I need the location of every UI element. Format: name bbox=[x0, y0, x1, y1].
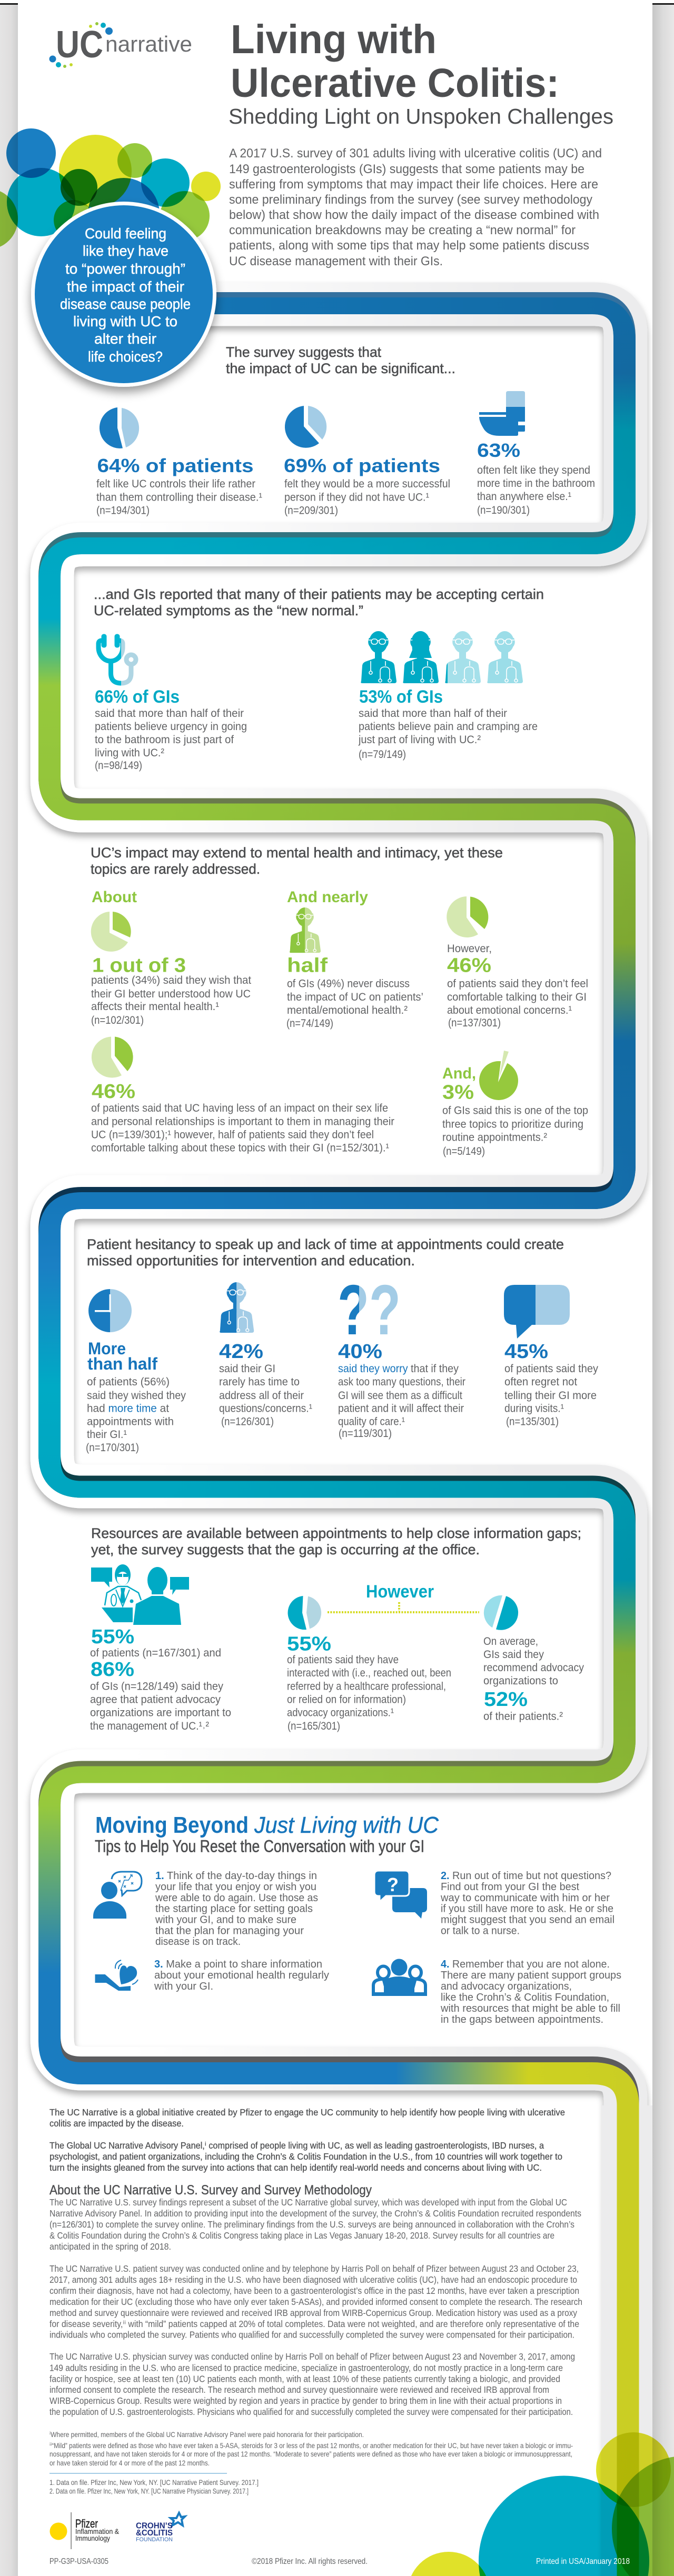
footnotes: ⁱWhere permitted, members of the Global UC Narrative Advisory Panel were paid honoraria for their participation. bbox=[49, 2430, 364, 2439]
stat: 64% of patients: (n=194/301) bbox=[96, 504, 150, 517]
stat: more than half, clock: their GI.¹ bbox=[87, 1429, 127, 1441]
stat: 63%: (n=190/301) bbox=[477, 504, 530, 516]
methodology text bbox=[49, 2197, 582, 2417]
intro paragraph: A 2017 U.S. survey of 301 adults living with ulcerative colitis (UC) and bbox=[229, 146, 602, 161]
panel: patient hesitancy bbox=[86, 1236, 598, 1454]
tip 1 bbox=[155, 1870, 318, 1948]
tip 3: 3. Make a point to share information bbox=[154, 1959, 322, 1970]
stat: 66% of GIs: patients believe urgency in going bbox=[95, 721, 247, 733]
tip 1: 1. Think of the day-to-day things in bbox=[155, 1870, 317, 1882]
stat: 69% of patients: (n=209/301) bbox=[284, 504, 338, 517]
tip 1: your life that you enjoy or wish you bbox=[155, 1881, 316, 1893]
intro paragraph bbox=[229, 146, 602, 268]
methodology heading: About the UC Narrative U.S. Survey and Survey Methodology bbox=[49, 2183, 372, 2198]
methodology text: The UC Narrative U.S. physician survey was conducted online by Harris Poll on behalf of Pfizer between August 23 and November 3, 2017, among bbox=[49, 2351, 575, 2362]
methodology text: the population of U.S. gastroenterologists. Physicians who qualified for and successfully completed the survey were compensated for their participation. bbox=[49, 2407, 573, 2417]
icon: hand holding heart bbox=[95, 1960, 138, 1991]
intro text bold: colitis are impacted by the disease. bbox=[49, 2118, 184, 2129]
stat: 45%: of patients said they bbox=[504, 1363, 598, 1375]
stat: 53% of GIs: (n=79/149) bbox=[359, 748, 406, 761]
stat: 69% of patients: person if they did not have UC.¹ bbox=[284, 492, 429, 503]
pie: 64% bbox=[100, 407, 139, 448]
footnotes: or have taken steroid for 4 or more of the past 12 months. bbox=[49, 2459, 210, 2467]
pie: 69% bbox=[285, 406, 326, 448]
stat: nearly half: (n=74/149) bbox=[286, 1017, 333, 1030]
heading: Just Living with UC bbox=[254, 1812, 439, 1838]
heading: yet, the survey suggests that the gap is occurring at the office. bbox=[91, 1542, 480, 1557]
logo: Pfizer Inflammation and Immunology: Immunology bbox=[75, 2534, 110, 2542]
tip 1: were able to do again. Use those as bbox=[155, 1892, 318, 1904]
stat: 66% of GIs bbox=[95, 687, 247, 772]
tip 4: There are many patient support groups bbox=[441, 1970, 621, 1981]
heading bbox=[226, 344, 455, 376]
stat: 52% of patients: 52% bbox=[484, 1689, 528, 1711]
heading bbox=[87, 1236, 564, 1269]
stat: 63%: often felt like they spend bbox=[477, 464, 590, 476]
stat: more than half, clock: appointments with bbox=[87, 1416, 174, 1427]
tip 2: or talk to a nurse. bbox=[441, 1925, 520, 1937]
references: 1. Data on file. Pfizer Inc, New York, NY. [UC Narrative Patient Survey. 2017.] bbox=[49, 2478, 259, 2487]
decorative circle cluster at top left bbox=[0, 128, 221, 249]
callout circle question: Could feeling bbox=[85, 225, 166, 242]
methodology text: medication for their UC (excluding those who have only ever taken 5-ASAs), and provided informed consent to complete the research. The research bbox=[49, 2297, 582, 2307]
title bbox=[231, 17, 559, 106]
stat: 1 out of 3 bbox=[91, 888, 251, 1026]
stat: 55% interacted: of patients said they have bbox=[287, 1654, 399, 1666]
panel: impact of UC bbox=[96, 344, 595, 517]
logo: Pfizer Inflammation and Immunology: Inflammation & bbox=[75, 2527, 120, 2535]
tip 3: about your emotional health regularly bbox=[154, 1970, 329, 1981]
stat: more than half, clock: had more time at bbox=[87, 1403, 169, 1415]
stat: 55% interacted: referred by a healthcare professional, bbox=[287, 1681, 446, 1693]
stat: nearly half bbox=[286, 888, 423, 1030]
callout circle question: life choices? bbox=[88, 348, 163, 365]
footer bbox=[49, 2557, 630, 2566]
icon: stethoscope bbox=[98, 636, 136, 683]
stat: 52% of patients: recommend advocacy bbox=[483, 1662, 584, 1674]
logo: UC narrative bbox=[49, 22, 192, 68]
methodology text: WIRB-Copernicus Group. Results were weighted by region and years in practice by gender to bring them in line with their actual proportions in bbox=[49, 2395, 562, 2406]
tip 1: that the plan for managing your bbox=[155, 1925, 304, 1937]
tip 2: way to communicate with him or her bbox=[440, 1892, 610, 1904]
stat: and 3% bbox=[442, 1051, 588, 1157]
decorative circles bottom right bbox=[408, 2432, 674, 2576]
heading bbox=[91, 845, 503, 877]
heading: the impact of UC can be significant... bbox=[226, 361, 455, 376]
stat: 42%: 42% bbox=[219, 1341, 263, 1363]
stat: 69% of patients: 69% of patients bbox=[284, 455, 440, 476]
stat: 55% and 86% agree: of GIs (n=128/149) said they bbox=[90, 1681, 223, 1693]
tip 2: if you still have more to ask. He or she bbox=[441, 1903, 613, 1915]
stat: 55% and 86% agree: the management of UC.¹˒² bbox=[90, 1720, 209, 1732]
stat: 66% of GIs: 66% of GIs bbox=[95, 687, 180, 707]
stat: 42%: address all of their bbox=[219, 1390, 304, 1402]
methodology text: The UC Narrative U.S. patient survey was conducted online and by telephone by Harris Poll on behalf of Pfizer between August 23 and October 23, bbox=[49, 2263, 579, 2274]
tip 3 bbox=[154, 1959, 329, 1992]
stat: more than half, clock: of patients (56%) bbox=[87, 1376, 170, 1388]
stat: however 46%: comfortable talking to their GI bbox=[447, 991, 587, 1003]
stat: 52% of patients: organizations to bbox=[483, 1675, 558, 1687]
intro text bold: The UC Narrative is a global initiative created by Pfizer to engage the UC community to help identify how people living with ulcerative bbox=[49, 2107, 565, 2118]
stat: 55% and 86% agree: 86% bbox=[91, 1659, 134, 1681]
intro paragraph: below) that show how the daily impact of the disease combined with bbox=[229, 208, 599, 222]
stat: 55% interacted: or relied on for information) bbox=[287, 1694, 406, 1705]
stat: 40%: (n=119/301) bbox=[339, 1427, 392, 1440]
stat: 55% interacted: 55% bbox=[287, 1633, 331, 1655]
heading: UC-related symptoms as the “new normal.” bbox=[94, 603, 363, 618]
intro paragraph: suffering from symptoms that may impact their life choices. Here are bbox=[229, 177, 598, 192]
stat: 66% of GIs: to the bathroom is just part of bbox=[95, 734, 234, 746]
heading: Resources are available between appointments to help close information gaps; bbox=[91, 1525, 581, 1541]
stat: more than half, clock: said they wished they bbox=[87, 1390, 186, 1402]
stat: 46% sex life: comfortable talking about these topics with their GI (n=152/301).¹ bbox=[91, 1142, 389, 1154]
stat: more than half, clock: than half bbox=[87, 1354, 157, 1373]
callout circle question bbox=[31, 202, 216, 387]
tip 4: and advocacy organizations, bbox=[441, 1981, 572, 1992]
methodology text: The UC Narrative U.S. survey findings represent a subset of the UC Narrative global survey, which was developed with input from the Global UC bbox=[49, 2197, 567, 2208]
stat: more than half, clock bbox=[86, 1289, 186, 1454]
stat: 64% of patients: felt like UC controls their life rather bbox=[96, 478, 255, 490]
tip 2: 2. Run out of time but not questions? bbox=[441, 1870, 611, 1882]
stat: 55% interacted: (n=165/301) bbox=[288, 1720, 340, 1732]
stat: and 3%: routine appointments.² bbox=[442, 1132, 547, 1143]
stat: 66% of GIs: (n=98/149) bbox=[95, 760, 142, 772]
stat: 46% sex life: UC (n=139/301);¹ however, half of patients said they don’t feel bbox=[91, 1129, 374, 1141]
stat: 55% and 86% agree: of patients (n=167/301) and bbox=[90, 1647, 221, 1659]
stat: 52% of patients bbox=[483, 1595, 584, 1723]
intro paragraph: some preliminary findings from the survey (see survey methodology bbox=[229, 193, 592, 207]
stat: 42%: said their GI bbox=[219, 1363, 275, 1375]
tip 1: the starting place for setting goals bbox=[155, 1903, 313, 1915]
heading bbox=[95, 1812, 439, 1856]
panel: GI new normal bbox=[94, 586, 544, 772]
methodology text: confirm their diagnosis, have not had a colectomy, have been to a gastroenterologist’s office in the past 12 months, have ever taken a prescription bbox=[49, 2285, 579, 2296]
stat: 1 out of 3: affects their mental health.¹ bbox=[91, 1001, 219, 1013]
stat: 64% of patients: 64% of patients bbox=[97, 455, 254, 476]
stat: 40%: ?? bbox=[338, 1270, 401, 1350]
stat: 46% sex life: of patients said that UC having less of an impact on their sex life bbox=[91, 1102, 388, 1114]
tip 2 bbox=[440, 1870, 614, 1937]
stat: 45%: (n=135/301) bbox=[506, 1416, 559, 1427]
stat: 55% and 86% agree: 55% bbox=[91, 1626, 134, 1648]
stat: 63%: than anywhere else.¹ bbox=[477, 491, 571, 503]
stat: more than half, clock: More bbox=[88, 1339, 126, 1358]
callout circle question: alter their bbox=[94, 331, 156, 347]
stat: 46% sex life: and personal relationships is important to them in managing their bbox=[91, 1116, 394, 1128]
stat: 53% of GIs: patients believe pain and cramping are bbox=[359, 721, 538, 733]
icon: group of people bbox=[372, 1959, 427, 1996]
logo: Crohn's and Colitis Foundation: &COLITIS bbox=[136, 2529, 173, 2538]
tip 4: with resources that might be able to fill bbox=[440, 2003, 620, 2014]
heading bbox=[94, 586, 544, 618]
intro text bold: turn the insights gleaned from the survey into actions that can help identify real-world needs and concerns about living with UC. bbox=[49, 2162, 542, 2173]
footer: PP-G3P-USA-0305 bbox=[49, 2557, 108, 2566]
heading: The survey suggests that bbox=[226, 344, 381, 360]
stat: 1 out of 3: About bbox=[92, 888, 137, 906]
intro text bold: psychologist, and patient organizations, including the Crohn’s & Colitis Foundation in the U.S., from 10 countries will work together to bbox=[49, 2151, 562, 2162]
stat: 52% of patients: On average, bbox=[483, 1635, 538, 1648]
stat: 45%: 45% bbox=[504, 1341, 548, 1363]
tip 4: in the gaps between appointments. bbox=[441, 2014, 603, 2025]
methodology text: & Colitis Foundation during the Crohn’s & Colitis Congress taking place in Las Vegas January 18-20, 2018. Survey results for all countries are bbox=[49, 2230, 554, 2241]
stat: 1 out of 3: their GI better understood how UC bbox=[91, 988, 251, 1000]
stat: 52% of patients: GIs said they bbox=[483, 1649, 544, 1661]
stat: 55% and 86% agree: agree that patient advocacy bbox=[90, 1694, 221, 1705]
stat: 69% of patients bbox=[284, 455, 450, 517]
tip 1: with your GI, and to make sure bbox=[155, 1914, 296, 1926]
stat: 42%: (n=126/301) bbox=[221, 1416, 274, 1427]
panel: mental health and intimacy bbox=[91, 845, 588, 1157]
stat: 55% interacted: advocacy organizations.¹ bbox=[287, 1706, 394, 1719]
stat: more than half, clock: (n=170/301) bbox=[86, 1442, 139, 1454]
panel: about and methodology bbox=[49, 2107, 582, 2495]
stat: 45%: telling their GI more bbox=[504, 1390, 597, 1402]
stat: however 46%: (n=137/301) bbox=[448, 1017, 501, 1029]
stat: 53% of GIs: said that more than half of their bbox=[359, 707, 507, 720]
stat: 64% of patients: than them controlling their disease.¹ bbox=[96, 492, 262, 503]
tip 1: disease is on track. bbox=[155, 1936, 241, 1948]
references: 2. Data on file. Pfizer Inc, New York, NY. [UC Narrative Physician Survey. 2017.] bbox=[49, 2487, 249, 2495]
callout circle question: living with UC to bbox=[73, 313, 177, 330]
stat: however 46% bbox=[447, 896, 588, 1029]
icon: two speech bubbles with question mark: ? bbox=[387, 1874, 399, 1895]
callout circle question: like they have bbox=[83, 243, 168, 259]
stat: and 3%: (n=5/149) bbox=[443, 1145, 485, 1157]
stat: 1 out of 3: 1 out of 3 bbox=[92, 955, 186, 977]
methodology text: anticipated in the spring of 2018. bbox=[49, 2241, 171, 2252]
stat: 55% interacted: interacted with (i.e., reached out, been bbox=[287, 1667, 451, 1679]
tip 2: might suggest that you send an email bbox=[441, 1914, 614, 1926]
callout circle question: disease cause people bbox=[60, 296, 191, 312]
footer: ©2018 Pfizer Inc. All rights reserved. bbox=[252, 2557, 368, 2566]
logo: UC narrative: UC bbox=[56, 24, 103, 66]
stat: 40%: GI will see them as a difficult bbox=[338, 1390, 462, 1402]
methodology text: individuals who completed the survey. Patients who qualified for and successfully completed the survey were compensated for their participation. bbox=[49, 2330, 574, 2340]
logo: Pfizer Inflammation and Immunology: Pfizer bbox=[75, 2517, 98, 2530]
logo: Crohn's and Colitis Foundation bbox=[136, 2513, 185, 2543]
intro text bold: The Global UC Narrative Advisory Panel,ⁱ comprised of people living with UC, as well as leading gastroenterologists, IBD nurses, a bbox=[49, 2140, 544, 2151]
methodology text: informed consent to complete the research. The research method and survey questionnaire were reviewed and received IRB approval from bbox=[49, 2384, 549, 2395]
tip 4: 4. Remember that you are not alone. bbox=[441, 1959, 610, 1970]
panel: tips bbox=[93, 1812, 621, 2025]
ribbon bbox=[49, 303, 628, 2576]
stat: 45%: often regret not bbox=[504, 1376, 577, 1388]
icon: four doctors bbox=[361, 631, 523, 683]
stat: 63% bbox=[477, 440, 595, 516]
heading: Patient hesitancy to speak up and lack of time at appointments could create bbox=[87, 1236, 564, 1252]
stat: 64% of patients bbox=[96, 455, 262, 517]
stat: 69% of patients: felt they would be a more successful bbox=[284, 478, 450, 490]
heading: Tips to Help You Reset the Conversation with your GI bbox=[95, 1837, 424, 1856]
stat: 53% of GIs bbox=[358, 687, 538, 761]
stat: nearly half: the impact of UC on patients’ bbox=[287, 991, 423, 1003]
intro paragraph: 149 gastroenterologists (GIs) suggests that some patients may be bbox=[229, 162, 584, 176]
references bbox=[49, 2473, 259, 2495]
stat: 42%: questions/concerns.¹ bbox=[219, 1403, 312, 1415]
intro paragraph: communication breakdowns may be creating a “new normal” for bbox=[229, 223, 576, 237]
callout circle question: the impact of their bbox=[67, 278, 184, 295]
stat: 55% and 86% agree: organizations are important to bbox=[90, 1706, 231, 1719]
footnotes bbox=[49, 2430, 573, 2467]
heading bbox=[91, 1525, 581, 1557]
panel: resources bbox=[90, 1525, 584, 1732]
subtitle: Shedding Light on Unspoken Challenges bbox=[229, 104, 613, 128]
stat: and 3%: three topics to prioritize during bbox=[442, 1118, 583, 1131]
stat: 63%: 63% bbox=[477, 440, 520, 461]
stat: 1 out of 3: patients (34%) said they wish that bbox=[91, 974, 251, 986]
intro text bold bbox=[49, 2107, 565, 2173]
intro paragraph: patients, along with some tips that may help some patients discuss bbox=[229, 238, 589, 253]
stat: 66% of GIs: said that more than half of their bbox=[95, 707, 244, 720]
methodology text: for disease severity,ⁱⁱ with “mild” patients capped at 20% of total completes. Data were not weighted, and are therefore only representative of the bbox=[49, 2319, 579, 2329]
stat: 46% sex life bbox=[91, 1037, 394, 1154]
logo: Pfizer Inflammation and Immunology bbox=[49, 2512, 120, 2549]
methodology text: (n=126/301) to complete the survey online. The preliminary findings from the U.S. surveys are being announced in collaboration with the Crohn’s bbox=[49, 2219, 574, 2230]
However connector: However bbox=[366, 1582, 434, 1602]
icon: two speech bubbles with question mark bbox=[374, 1871, 427, 1919]
stat: however 46%: about emotional concerns.¹ bbox=[447, 1004, 572, 1016]
logo: Crohn's and Colitis Foundation: CROHN’S bbox=[136, 2521, 173, 2531]
stat: nearly half: half bbox=[287, 955, 328, 977]
callout circle question: to “power through” bbox=[65, 261, 185, 277]
stat: 63%: more time in the bathroom bbox=[477, 477, 595, 490]
stat: 53% of GIs: just part of living with UC.² bbox=[358, 734, 481, 746]
methodology text: method and survey questionnaire were reviewed and received IRB approval from WIRB-Copernicus Group. Medication history was used as a proxy bbox=[49, 2308, 577, 2318]
stat: 40%: quality of care.¹ bbox=[338, 1416, 405, 1427]
stat: 45%: during visits.¹ bbox=[504, 1403, 564, 1415]
stat: and 3%: And, bbox=[442, 1065, 476, 1082]
stat: 40%: 40% bbox=[338, 1341, 382, 1363]
stat: 45% bbox=[504, 1285, 598, 1427]
stat: nearly half: And nearly bbox=[287, 888, 368, 906]
methodology text: 2017, among 301 adults ages 18+ residing in the U.S. who have been diagnosed with ulcerative colitis (UC), have had an endoscopic procedure to bbox=[49, 2274, 577, 2285]
stat: 40%: said they worry that if they bbox=[338, 1363, 459, 1375]
stat: 40% bbox=[338, 1270, 465, 1440]
stat: 53% of GIs: 53% of GIs bbox=[359, 687, 443, 707]
stat: and 3%: 3% bbox=[442, 1082, 474, 1104]
footnotes: ⁱⁱ“Mild” patients were defined as those who have ever taken a 5-ASA, steroids for 3 or less of the past 12 months, or another medication for their UC, but have never taken a biologic or immu- bbox=[49, 2441, 573, 2450]
stat: nearly half: of GIs (49%) never discuss bbox=[287, 978, 410, 990]
stat: and 3%: of GIs said this is one of the top bbox=[442, 1105, 588, 1117]
tip 2: Find out from your GI the best bbox=[441, 1881, 579, 1893]
stat: 40%: ask too many questions, their bbox=[338, 1376, 465, 1388]
icon: doctor and patient talking bbox=[91, 1564, 189, 1625]
stat: 40%: patient and it will affect their bbox=[338, 1403, 464, 1415]
stat: 1 out of 3: (n=102/301) bbox=[91, 1014, 144, 1026]
footnotes: nosuppressant, and have not taken steroids for 4 or more of the past 12 months. “Moderate to severe” patients were defined as those who have ever taken a biologic or immunosuppressant, bbox=[49, 2450, 572, 2458]
stat: 46% sex life: 46% bbox=[92, 1081, 135, 1103]
stat: however 46%: However, bbox=[447, 943, 492, 955]
icon: toilet bbox=[479, 391, 525, 436]
However connector bbox=[328, 1582, 479, 1612]
stat: 42% bbox=[219, 1282, 312, 1427]
methodology text: 149 adults residing in the U.S. who are licensed to practice medicine, specialize in gastroenterology, do not mostly practice in a long-term care bbox=[49, 2363, 563, 2373]
heading: Moving Beyond bbox=[95, 1812, 249, 1838]
stat: 52% of patients: of their patients.² bbox=[483, 1711, 563, 1723]
stat: however 46%: of patients said they don’t feel bbox=[447, 978, 588, 990]
logo: UC narrative: narrative bbox=[105, 32, 192, 56]
icon: person with plan bubble bbox=[93, 1872, 142, 1919]
tip 4 bbox=[440, 1959, 621, 2025]
intro paragraph: UC disease management with their GIs. bbox=[229, 254, 443, 268]
tip 4: like the Crohn’s & Colitis Foundation, bbox=[441, 1992, 609, 2003]
footer: Printed in USA/January 2018 bbox=[536, 2557, 630, 2566]
methodology text: Narrative Advisory Panel. In addition to providing input into the development of the survey, the Crohn’s & Colitis Foundation recruited respondents bbox=[49, 2208, 581, 2219]
title: Ulcerative Colitis: bbox=[231, 61, 559, 106]
snaking panel backing bbox=[52, 304, 652, 2576]
stat: however 46%: 46% bbox=[447, 955, 491, 977]
stat: 55% interacted bbox=[287, 1596, 451, 1732]
stat: 55% and 86% agree bbox=[90, 1626, 231, 1732]
heading: missed opportunities for intervention and education. bbox=[87, 1253, 415, 1269]
heading: topics are rarely addressed. bbox=[91, 861, 260, 877]
heading: UC’s impact may extend to mental health and intimacy, yet these bbox=[91, 845, 503, 861]
tip 3: with your GI. bbox=[154, 1981, 213, 1992]
stat: 66% of GIs: living with UC.² bbox=[95, 747, 164, 759]
methodology text: facility or hospice, see at least ten (10) UC patients each month, with at least 10% of these patients currently taking a biologic, and provided bbox=[49, 2374, 560, 2384]
title: Living with bbox=[231, 17, 437, 62]
stat: 42%: rarely has time to bbox=[219, 1376, 300, 1388]
heading: ...and GIs reported that many of their patients may be accepting certain bbox=[94, 586, 544, 602]
stat: nearly half: mental/emotional health.² bbox=[287, 1004, 408, 1016]
logo: Crohn's and Colitis Foundation: FOUNDATION bbox=[136, 2537, 173, 2543]
